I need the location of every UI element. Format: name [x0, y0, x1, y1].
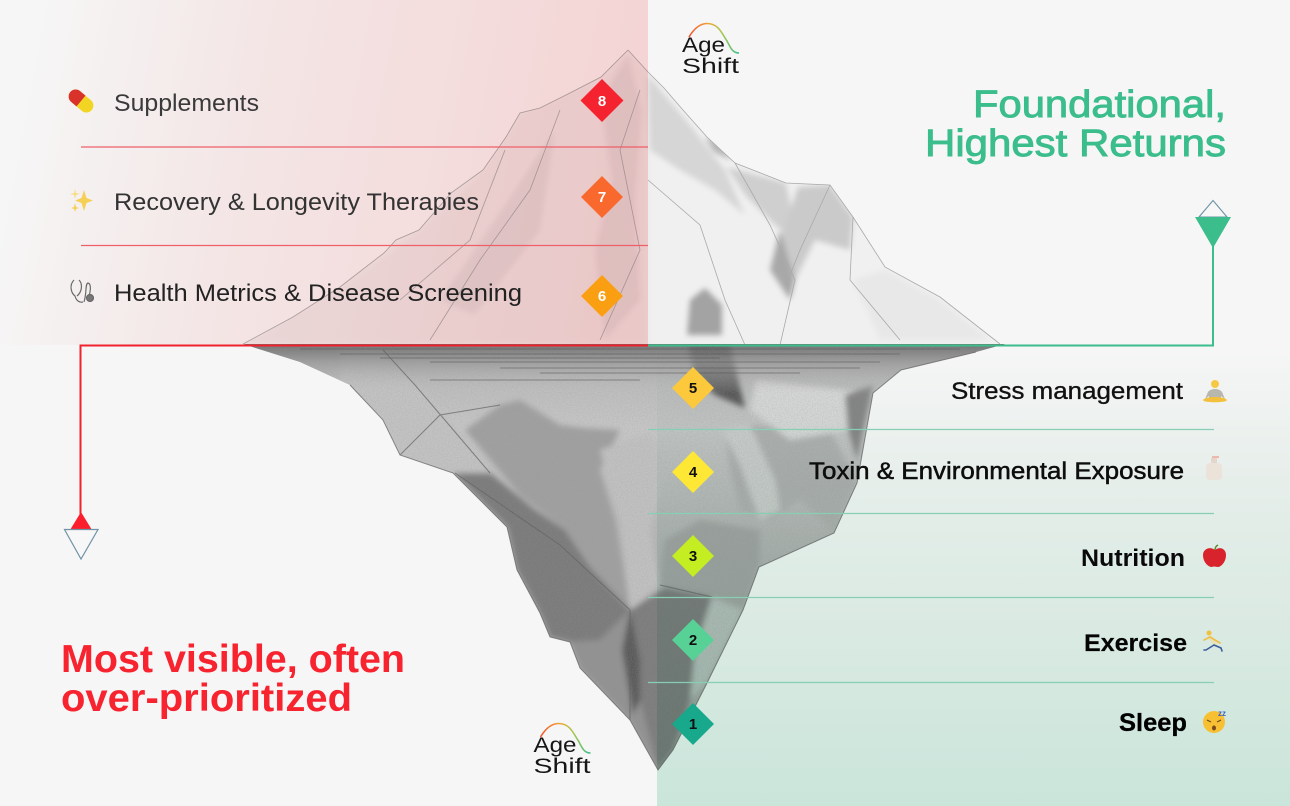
- list item 3: nutrition: [1081, 545, 1226, 572]
- rank badge 7: 7: [598, 189, 606, 206]
- rank badge 2: [672, 619, 714, 661]
- logo: top: Shift: [682, 55, 739, 78]
- rank badge 7: [581, 176, 623, 218]
- heading: foundational: [925, 84, 1226, 165]
- rank badge 6: [581, 275, 623, 317]
- icon: meditating person: [1203, 380, 1227, 402]
- logo: top: [682, 24, 739, 78]
- panel: green gradient over the base: [657, 345, 1290, 806]
- list item 8: supplements: Supplements: [114, 90, 259, 117]
- panel: red gradient over the tip: [0, 0, 648, 345]
- rank badge 4: [672, 451, 714, 493]
- divider lines: lower list: [648, 430, 1214, 682]
- list item 3: nutrition: Nutrition: [1081, 545, 1185, 572]
- list item 5: stress management: Stress management: [951, 378, 1183, 405]
- logo: top: Age: [682, 34, 725, 57]
- heading: foundational: Highest Returns: [925, 123, 1226, 165]
- rank badge 1: 1: [689, 716, 697, 733]
- logo: bottom: [534, 724, 591, 778]
- arrow: green upward path: [648, 200, 1231, 346]
- rank badge 3: 3: [689, 548, 697, 565]
- list item 8: supplements: [66, 87, 259, 117]
- icon: sleeping face: zz: [1218, 709, 1226, 718]
- rank badge 8: 8: [598, 93, 606, 110]
- heading: foundational: Foundational,: [973, 84, 1226, 126]
- heading: most visible: over-prioritized: [61, 677, 352, 720]
- icon: running person: [1204, 630, 1222, 651]
- arrow: red downward path: [64, 346, 648, 559]
- list item 6: health metrics: Health Metrics & Disease Screening: [114, 280, 522, 307]
- icon: stethoscope: [71, 280, 94, 302]
- heading: most visible: [61, 638, 405, 720]
- rank badge 1: [672, 703, 714, 745]
- rank badge 6: 6: [598, 288, 606, 305]
- logo: bottom: Shift: [534, 755, 591, 778]
- rank badge 5: 5: [689, 380, 697, 397]
- iceberg below water: [243, 344, 1005, 770]
- icon: lotion bottle: [1206, 457, 1222, 480]
- rank badge 5: [672, 367, 714, 409]
- list item 4: toxin exposure: Toxin & Environmental Exposure: [809, 458, 1184, 485]
- list item 7: recovery: Recovery & Longevity Therapies: [114, 189, 479, 216]
- waterline band: [245, 344, 1005, 394]
- texture grain: [243, 344, 1005, 770]
- list item 1: sleep: Sleep: [1119, 709, 1187, 737]
- iceberg above water: [243, 50, 1000, 345]
- rank badge 8: [580, 79, 624, 122]
- rank badge 3: [672, 535, 714, 577]
- icon: pill: [66, 87, 96, 115]
- divider lines: upper list: [81, 147, 648, 246]
- iceberg illustration: [243, 50, 1005, 770]
- list item 1: sleep: [1119, 709, 1226, 737]
- icon: apple: [1203, 545, 1226, 567]
- list item 2: exercise: Exercise: [1084, 630, 1187, 657]
- rank badge 2: 2: [689, 632, 697, 649]
- rank badge 4: 4: [689, 464, 698, 481]
- icon: sparkles: [70, 189, 93, 212]
- heading: most visible: Most visible, often: [61, 638, 405, 681]
- logo: bottom: Age: [534, 734, 576, 757]
